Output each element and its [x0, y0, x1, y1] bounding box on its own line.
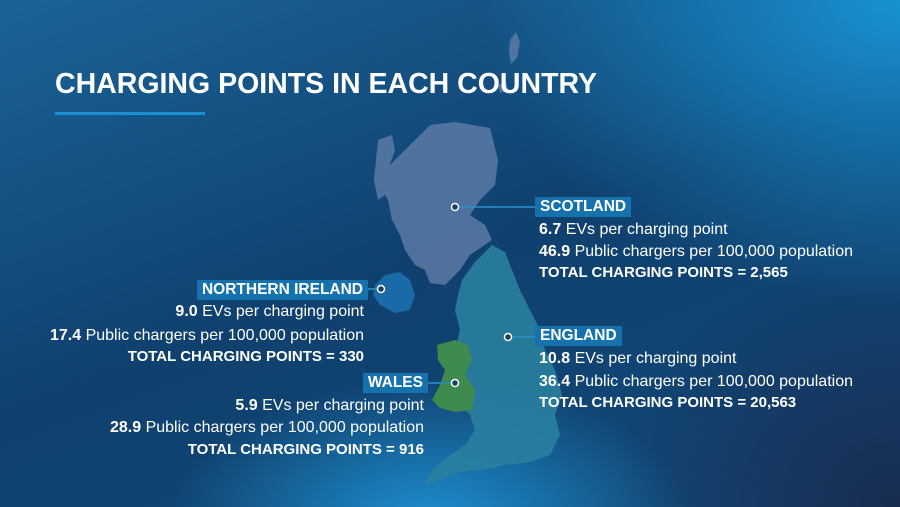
- block: england: 36.4 Public chargers per 100,000 population: [539, 373, 853, 390]
- block: scotland: SCOTLAND: [540, 198, 626, 215]
- block: northern ireland: [50, 280, 368, 365]
- block: scotland: 46.9 Public chargers per 100,000 population: [539, 243, 853, 260]
- title: CHARGING POINTS IN EACH COUNTRY: [55, 68, 597, 100]
- map: scotland: [374, 32, 520, 285]
- block: scotland: 6.7 EVs per charging point: [539, 221, 728, 238]
- map: england: [425, 245, 562, 485]
- block: wales: WALES: [368, 374, 423, 391]
- block: england: TOTAL CHARGING POINTS = 20,563: [539, 394, 796, 411]
- block: wales: 5.9 EVs per charging point: [235, 397, 424, 414]
- block: scotland: [535, 197, 853, 281]
- block: england: ENGLAND: [540, 327, 617, 344]
- block: scotland: TOTAL CHARGING POINTS = 2,565: [539, 264, 788, 281]
- block: northern ireland: 17.4 Public chargers per 100,000 population: [50, 327, 364, 344]
- block: wales: 28.9 Public chargers per 100,000 population: [110, 419, 424, 436]
- map: northern ireland: [373, 272, 415, 313]
- block: england: 10.8 EVs per charging point: [539, 350, 736, 367]
- block: northern ireland: NORTHERN IRELAND: [202, 281, 363, 298]
- block: wales: TOTAL CHARGING POINTS = 916: [188, 441, 424, 458]
- block: northern ireland: 9.0 EVs per charging point: [175, 303, 364, 320]
- block: england: [535, 326, 853, 411]
- block: wales: [110, 373, 428, 458]
- block: northern ireland: TOTAL CHARGING POINTS = 330: [128, 348, 364, 365]
- map: wales: [432, 340, 475, 412]
